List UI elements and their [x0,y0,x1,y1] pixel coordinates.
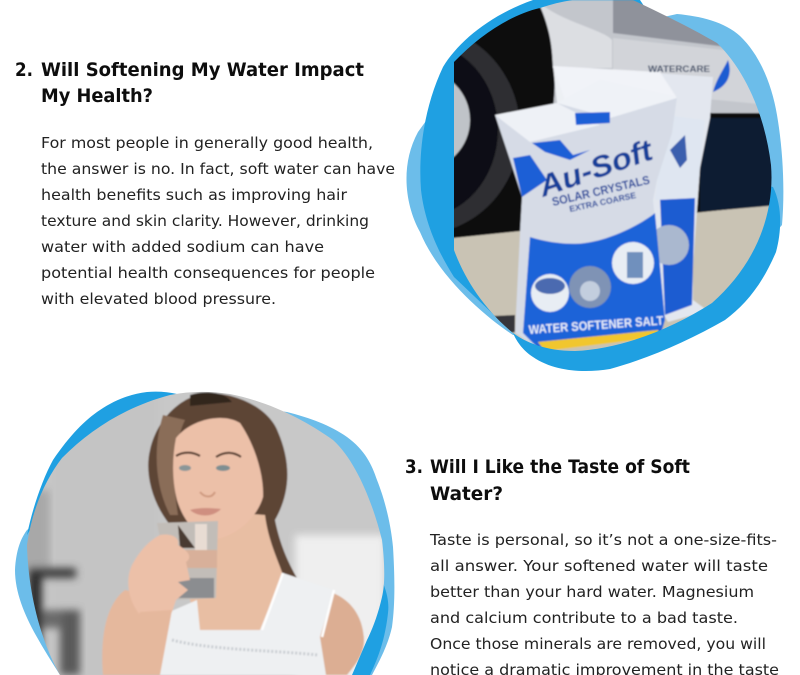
dark blue blob accents [27,392,388,675]
light blue blob backdrop [15,400,394,675]
glass of water [157,521,218,600]
section 2: body text: potential health consequences for people [41,264,375,282]
section 2: body text: health benefits such as improving hair [41,186,348,204]
section 3: body text: better than your hard water. Magnesium [430,583,754,601]
photograph of bags in front of a van: SOLAR CRYSTALS [551,173,651,209]
photograph of bags in front of a van [454,0,772,351]
photo blob: woman drinking water [15,385,394,675]
bag labels: Au-Soft [534,133,659,204]
front bag [495,80,677,350]
section 3: heading: 3. [405,456,423,478]
hair back [148,393,297,578]
section 3: body text: and calcium contribute to a bad taste. [430,609,738,627]
section 2: body text: the answer is no. In fact, soft water can have [41,160,395,178]
section 2: body text: texture and skin clarity. However, drinking [41,212,369,230]
section 2: heading: Will Softening My Water Impact [41,59,364,81]
section 2: body text: with elevated blood pressure. [41,290,276,308]
white lace top [155,573,334,675]
section 3: heading [405,456,690,505]
section 2: heading [15,59,364,107]
bag circular pictograms [531,274,569,312]
section 3: heading: Will I Like the Taste of Soft [430,456,690,478]
section 2: heading: 2. [15,59,33,81]
facial features [176,453,241,516]
section 3: body text: Once those minerals are removed, you will [430,635,766,653]
light blue blob backdrop [406,14,783,335]
neck and chest [190,510,283,632]
hand [128,535,190,621]
dark blue blob backdrop [420,0,780,371]
section 3: body text: all answer. Your softened water will taste [430,557,768,575]
section 2: heading: My Health? [41,85,153,107]
section 3: body text: Taste is personal, so it’s not a one-size-fits- [429,531,777,549]
back bag [652,74,713,322]
photograph of woman [20,385,390,675]
section 2: body text [41,134,395,308]
photograph of bags in front of a van: EXTRA COARSE [568,190,637,214]
photograph of bags in front of a van: WATERCARE [648,64,710,74]
face [172,416,264,523]
photo blob: water softener salt bags [406,0,784,371]
photograph of bags in front of a van: WATER SOFTENER SALT [528,314,664,337]
section 2: body text: water with added sodium can have [41,238,324,256]
section 3: body text [429,531,779,675]
section 2: body text: For most people in generally good health, [41,134,373,152]
section 3: heading: Water? [430,483,503,505]
arms and shoulders [102,590,140,675]
